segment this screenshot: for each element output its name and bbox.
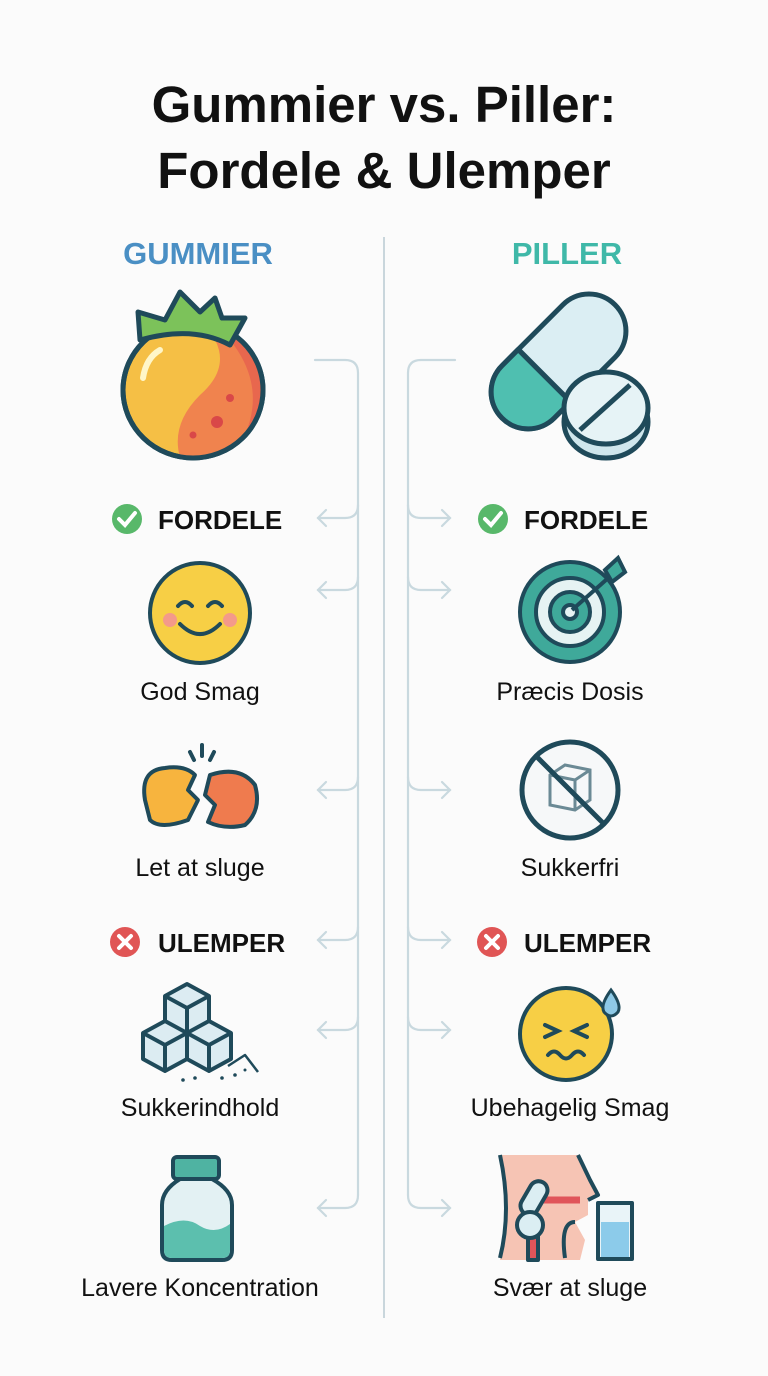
- label: sukkerindhold: Sukkerindhold: [121, 1094, 279, 1122]
- icon: sugar cubes: [143, 984, 258, 1082]
- heading: piller: PILLER: [512, 236, 622, 271]
- label: god smag: God Smag: [140, 678, 260, 706]
- title: Fordele & Ulemper: [157, 142, 611, 199]
- icon: pills: [476, 279, 648, 458]
- section: gummier ulemper: ULEMPER: [158, 928, 285, 958]
- label: sukkerfri: Sukkerfri: [521, 854, 619, 882]
- heading: gummier: GUMMIER: [123, 236, 273, 271]
- icon: throat swallowing: [500, 1155, 632, 1260]
- label: praecis dosis: Præcis Dosis: [496, 678, 644, 706]
- section: piller fordele: FORDELE: [524, 505, 648, 535]
- section: piller ulemper: ULEMPER: [524, 928, 651, 958]
- label: let at sluge: Let at sluge: [135, 854, 265, 882]
- section: gummier fordele: FORDELE: [158, 505, 282, 535]
- icon: sick face: [520, 988, 619, 1080]
- label: ubehagelig smag: Ubehagelig Smag: [471, 1094, 669, 1122]
- icon: target: [520, 558, 625, 662]
- title: Gummier vs. Piller:: [152, 76, 616, 133]
- connector: right bracket: [408, 360, 455, 1216]
- label: lavere koncentration: Lavere Koncentration: [81, 1274, 319, 1302]
- icon: no sugar: [522, 742, 618, 838]
- connector: left bracket: [315, 360, 358, 1216]
- icon: broken gummy: [144, 745, 257, 827]
- icon: jar: [162, 1157, 232, 1260]
- icon: gummy fruit: [120, 290, 266, 460]
- label: svaer at sluge: Svær at sluge: [493, 1274, 647, 1302]
- icon: smiley: [150, 563, 250, 663]
- title: [152, 76, 616, 199]
